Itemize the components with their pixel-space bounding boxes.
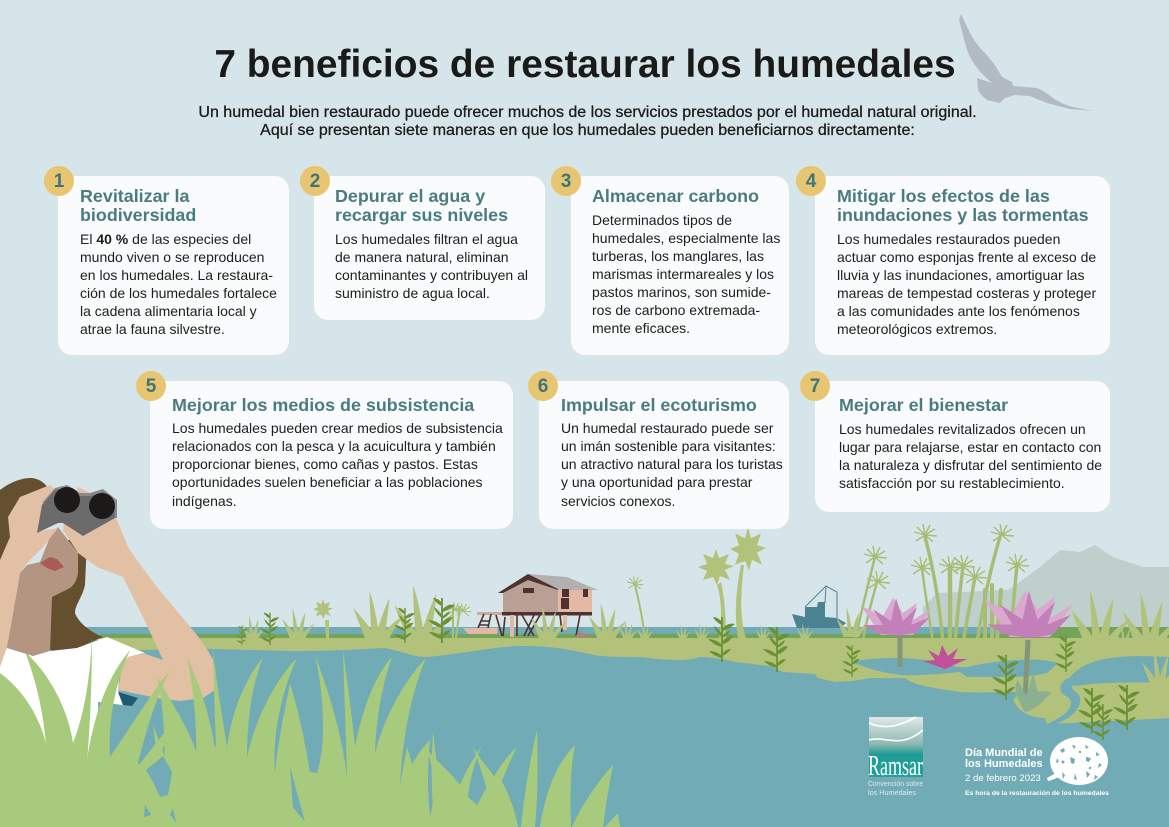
- heading 2: recargar sus niveles: [335, 205, 508, 225]
- badge 2: [300, 166, 330, 196]
- light grass tufts: [241, 585, 1169, 684]
- text 1: El 40 % de las especies del: [80, 231, 251, 247]
- icon: bird: [959, 14, 1093, 111]
- foreground grass: [0, 637, 620, 827]
- text 6: y una oportunidad para prestar: [561, 474, 752, 490]
- panel: benefit 2: [314, 176, 545, 320]
- panel: benefit 7: [815, 381, 1110, 512]
- heading 4: Mitigar los efectos de las: [837, 186, 1050, 206]
- text 3: [592, 212, 780, 336]
- badge 7: [800, 371, 830, 401]
- text 4: Los humedales restaurados pueden: [837, 231, 1060, 247]
- text 5: Los humedales pueden crear medios de subsistencia: [172, 420, 503, 436]
- far bank: [100, 627, 1169, 645]
- panel: benefit 1: [58, 176, 289, 355]
- text 5: oportunidades suelen beneficiar a las poblaciones: [172, 474, 483, 490]
- badge 1: 1: [54, 171, 64, 192]
- logo: Ramsar: Convención sobre: [868, 779, 923, 788]
- badge 7: 7: [810, 376, 820, 397]
- text 1: la cadena alimentaria local y: [80, 303, 257, 319]
- badge 2: 2: [310, 171, 320, 192]
- text 4: [837, 231, 1096, 337]
- text 7: la naturaleza y disfrutar del sentimiento de: [839, 457, 1102, 473]
- badge 6: [528, 371, 558, 401]
- text 6: servicios conexos.: [561, 493, 675, 509]
- panel: benefit 5: [150, 381, 513, 529]
- text 7: lugar para relajarse, estar en contacto con: [839, 439, 1101, 455]
- panel: benefit 4: [815, 176, 1110, 355]
- text 4: meteorológicos extremos.: [837, 321, 997, 337]
- person with binoculars: [0, 478, 215, 790]
- text 2: suministro de agua local.: [335, 285, 490, 301]
- gaps between blades: [144, 756, 305, 822]
- text 3: pastos marinos, son sumide-: [592, 284, 771, 300]
- badge 5: 5: [146, 376, 156, 397]
- text 5: [172, 420, 503, 509]
- ponds: [852, 656, 1169, 724]
- text 1: atrae la fauna silvestre.: [80, 321, 225, 337]
- text 5: indígenas.: [172, 493, 237, 509]
- ship: [792, 586, 846, 628]
- text 7: Los humedales revitalizados ofrecen un: [839, 421, 1086, 437]
- heading 2: Depurar el agua y: [335, 186, 485, 206]
- intro text: Aquí se presentan siete maneras en que los humedales pueden beneficiarnos directamente:: [260, 122, 915, 139]
- logo: Ramsar: [868, 717, 923, 797]
- text 6: un imán sostenible para visitantes:: [561, 438, 776, 454]
- heading 4: inundaciones y las tormentas: [837, 205, 1089, 225]
- intro text: Un humedal bien restaurado puede ofrecer muchos de los servicios prestados por el humedal natural original.: [198, 104, 977, 121]
- text 6: Un humedal restaurado puede ser: [561, 420, 773, 436]
- logo: Ramsar: los Humedales: [868, 788, 916, 797]
- heading 3: Almacenar carbono: [592, 186, 759, 206]
- heading 1: Revitalizar la: [80, 186, 189, 206]
- text 7: [839, 421, 1102, 491]
- stilt house: [463, 574, 598, 638]
- text 2: contaminantes y contribuyen al: [335, 267, 528, 283]
- text 4: a las comunidades ante los fenómenos: [837, 303, 1080, 319]
- palm trees: [313, 527, 766, 638]
- mountain: [923, 545, 1169, 630]
- panel: benefit 6: [539, 381, 789, 529]
- text 1: [80, 231, 277, 337]
- badge 6: 6: [538, 376, 548, 397]
- heading 4: [837, 186, 1089, 225]
- badge 5: [136, 371, 166, 401]
- text 3: humedales, especialmente las: [592, 230, 780, 246]
- logo: Día Mundial de los Humedales: Día Mundial de: [965, 747, 1043, 759]
- heading 6: Impulsar el ecoturismo: [561, 395, 757, 415]
- text 4: mareas de tempestad costeras y proteger: [837, 285, 1096, 301]
- title: 7 beneficios de restaurar los humedales: [214, 43, 956, 86]
- lotus flowers: [861, 591, 1072, 712]
- badge 4: 4: [806, 171, 816, 192]
- text 6: un atractivo natural para los turistas: [561, 456, 783, 472]
- land: [100, 638, 1169, 724]
- text 5: proporcionar bienes, como cañas y pastos. Estas: [172, 456, 478, 472]
- intro text: [198, 104, 977, 139]
- text 3: marismas intermareales y los: [592, 266, 774, 282]
- text 3: mente eficaces.: [592, 320, 690, 336]
- logo: Día Mundial de los Humedales: Es hora de la restauración de los humedales: [965, 790, 1109, 797]
- text 2: Los humedales filtran el agua: [335, 231, 518, 247]
- text 3: turberas, los manglares, las: [592, 248, 764, 264]
- heading 1: [80, 186, 196, 225]
- lake: [0, 640, 1169, 827]
- logo: Día Mundial de los Humedales: 2 de febrero 2023: [965, 773, 1041, 784]
- distant water: [70, 627, 1169, 637]
- text 7: satisfacción por su restablecimiento.: [839, 475, 1065, 491]
- logo: Día Mundial de los Humedales: [965, 737, 1109, 797]
- heading 1: biodiversidad: [80, 205, 196, 225]
- badge 3: [551, 166, 581, 196]
- text 2: de manera natural, eliminan: [335, 249, 509, 265]
- logo: Ramsar: Ramsar: [868, 750, 923, 782]
- heading 7: Mejorar el bienestar: [839, 395, 1008, 415]
- text 1: ción de los humedales fortalece: [80, 285, 277, 301]
- text 6: [561, 420, 783, 509]
- heading 5: Mejorar los medios de subsistencia: [172, 395, 474, 415]
- text 1: en los humedales. La restaura-: [80, 267, 273, 283]
- text 1: mundo viven o se reproducen: [80, 249, 264, 265]
- papyrus stand: [447, 524, 1029, 643]
- text 4: lluvia y las inundaciones, amortiguar las: [837, 267, 1084, 283]
- badge 3: 3: [561, 171, 571, 192]
- text 3: Determinados tipos de: [592, 212, 732, 228]
- badge 1: [44, 166, 74, 196]
- heading 2: [335, 186, 508, 225]
- text 3: ros de carbono extremada-: [592, 302, 760, 318]
- text 2: [335, 231, 528, 301]
- text 4: actuar como esponjas frente al exceso de: [837, 249, 1096, 265]
- dark green plants: [236, 598, 1140, 740]
- text 5: relacionados con la pesca y la acuicultura y también: [172, 438, 496, 454]
- logo: Día Mundial de los Humedales: los Humedales: [965, 758, 1043, 770]
- panel: benefit 3: [571, 176, 789, 355]
- badge 4: [796, 166, 826, 196]
